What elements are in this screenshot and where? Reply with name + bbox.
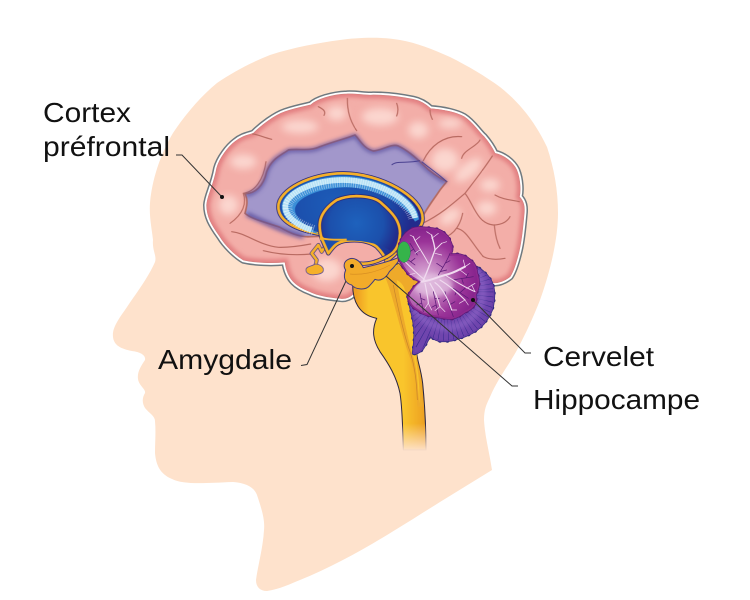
cerebellum outer folia xyxy=(406,266,496,356)
cerebellum arbor vitae xyxy=(398,228,478,318)
green nucleus xyxy=(398,242,410,262)
label: cortex prefrontal: Cortex xyxy=(43,97,131,128)
fornix and mammillary body xyxy=(306,238,325,275)
striped band xyxy=(282,176,419,234)
label: cervelet: Cervelet xyxy=(543,341,654,372)
hippocampus and amygdala body xyxy=(344,253,403,289)
leader: hippocampe xyxy=(386,276,518,386)
leader: cervelet xyxy=(471,298,531,353)
dark fissures xyxy=(402,243,473,317)
head silhouette xyxy=(113,38,558,591)
label: hippocampe: Hippocampe xyxy=(533,384,700,415)
cingulate purple region xyxy=(245,135,447,237)
hindbrain group xyxy=(344,228,494,451)
leader: cortex prefrontal xyxy=(176,155,224,199)
brainstem xyxy=(353,263,430,451)
corpus callosum and ventricle xyxy=(278,173,423,264)
pale branches xyxy=(405,232,475,312)
thalamus loop xyxy=(320,196,400,253)
leader: amygdale xyxy=(301,264,354,366)
label: cortex prefrontal: préfrontal xyxy=(43,131,170,162)
stem fade xyxy=(399,423,430,451)
label: cortex prefrontal xyxy=(43,97,170,162)
sulci lines xyxy=(230,98,519,259)
label: amygdale: Amygdale xyxy=(158,344,292,375)
cortex outline and lobes xyxy=(207,94,524,299)
brain illustration xyxy=(207,94,524,451)
